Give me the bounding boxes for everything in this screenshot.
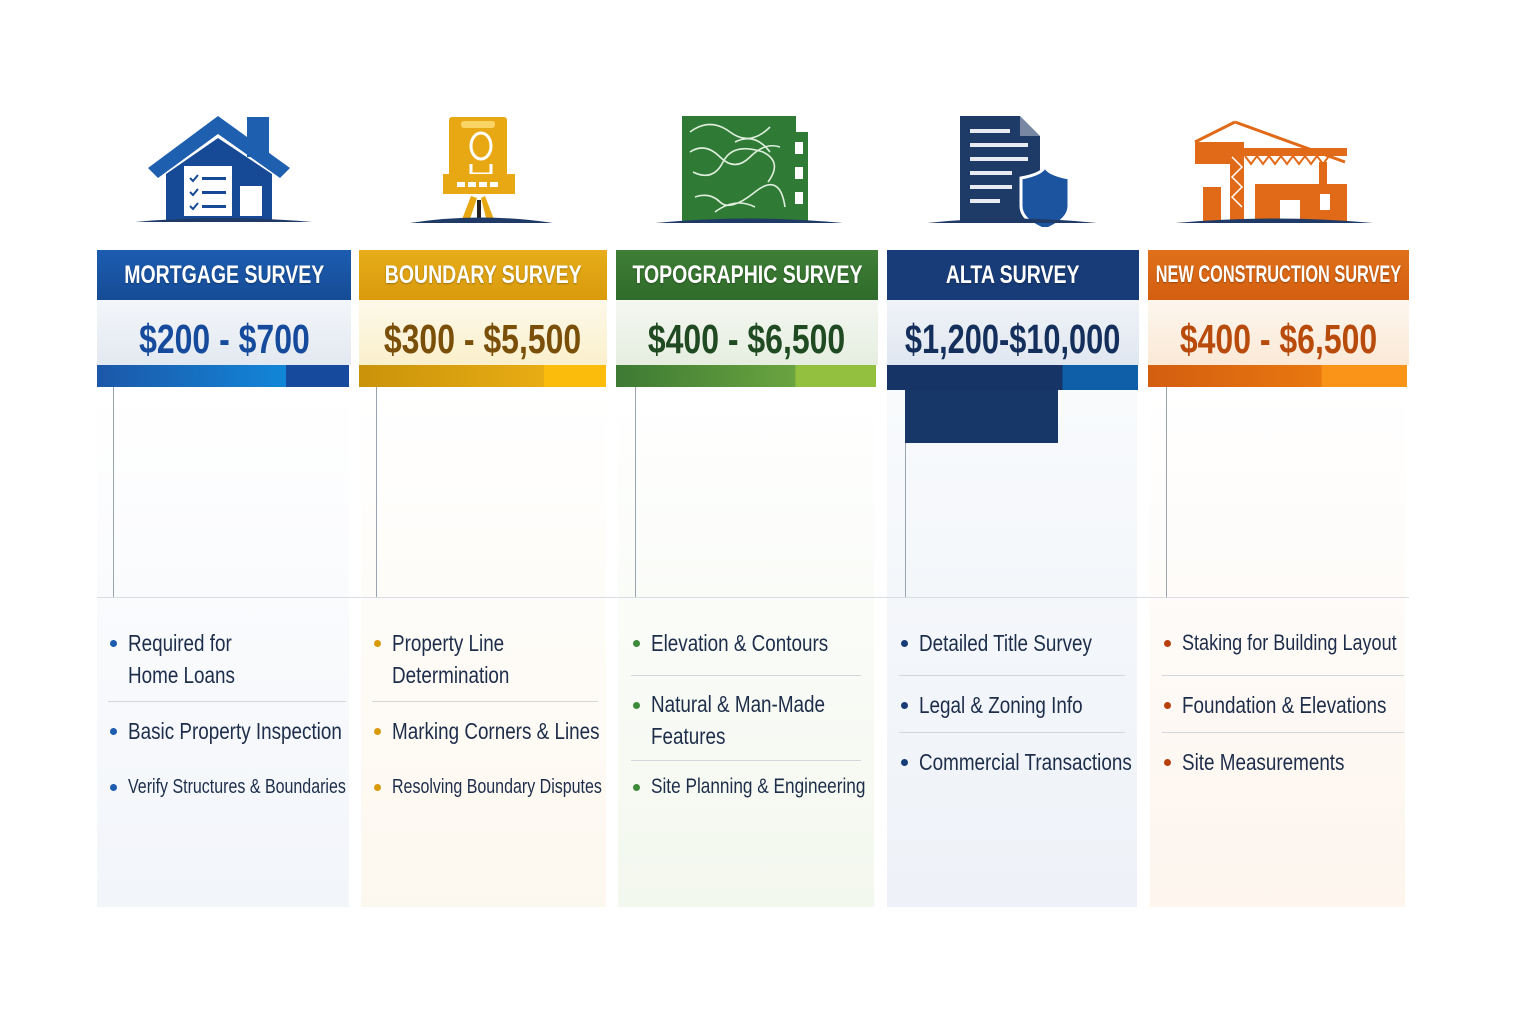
- price: alta: [887, 300, 1139, 365]
- bullets: construction: Foundation & Elevations: [1182, 692, 1386, 718]
- bullets: boundary: [372, 630, 602, 798]
- bullets: boundary: Determination: [392, 662, 509, 688]
- header: alta: [887, 250, 1139, 300]
- price: mortgage: $200 - $700: [139, 316, 309, 362]
- bullets: topographic: [631, 630, 865, 798]
- dark block: [905, 390, 1058, 443]
- bullets: boundary: Marking Corners & Lines: [392, 718, 600, 744]
- bullets: construction: Site Measurements: [1182, 749, 1344, 775]
- header: boundary: [359, 250, 607, 300]
- icon: house with checklist: [136, 116, 312, 222]
- bullets: mortgage: Required for: [128, 630, 232, 656]
- header: topographic: TOPOGRAPHIC SURVEY: [632, 260, 862, 288]
- header: boundary: BOUNDARY SURVEY: [385, 260, 581, 288]
- bullets: mortgage: Home Loans: [128, 662, 235, 688]
- panel: topographic survey: [616, 250, 878, 907]
- panel: alta survey: [887, 250, 1139, 907]
- price: topographic: [616, 300, 878, 365]
- header: alta: ALTA SURVEY: [946, 260, 1080, 288]
- icon: construction crane: [1176, 120, 1372, 223]
- price: boundary: [359, 300, 607, 365]
- bullets: mortgage: [108, 630, 346, 798]
- bullets: mortgage: Verify Structures & Boundaries: [128, 776, 346, 798]
- bullets: boundary: Property Line: [392, 630, 504, 656]
- price: construction: [1148, 300, 1409, 365]
- bullets: alta: Detailed Title Survey: [919, 630, 1092, 656]
- icon: document with shield: [927, 116, 1096, 227]
- price: construction: $400 - $6,500: [1180, 316, 1377, 362]
- panel: new construction survey: [1148, 250, 1409, 907]
- price: boundary: $300 - $5,500: [384, 316, 582, 362]
- header: construction: NEW CONSTRUCTION SURVEY: [1156, 261, 1401, 288]
- bullets: topographic: Features: [651, 723, 725, 749]
- bullets: alta: Commercial Transactions: [919, 749, 1132, 775]
- icon: topographic map: [656, 116, 842, 223]
- icon: total station: [410, 117, 553, 223]
- price: mortgage: [97, 300, 351, 365]
- bullets: topographic: Elevation & Contours: [651, 630, 828, 656]
- price: alta: $1,200-$10,000: [905, 316, 1121, 362]
- panel: boundary survey: [359, 250, 607, 907]
- bullets: boundary: Resolving Boundary Disputes: [392, 776, 602, 798]
- bullets: construction: Staking for Building Layout: [1182, 630, 1397, 655]
- price: topographic: $400 - $6,500: [648, 316, 846, 362]
- panel: mortgage survey: [97, 250, 351, 907]
- bullets: mortgage: Basic Property Inspection: [128, 718, 342, 744]
- bullets: topographic: Site Planning & Engineering: [651, 775, 865, 798]
- header: construction: [1148, 250, 1409, 300]
- bullets: topographic: Natural & Man-Made: [651, 691, 825, 717]
- bullets: construction: [1162, 630, 1404, 775]
- header: mortgage: [97, 250, 351, 300]
- header: topographic: [616, 250, 878, 300]
- header: mortgage: MORTGAGE SURVEY: [124, 260, 324, 288]
- bullets: alta: Legal & Zoning Info: [919, 692, 1083, 718]
- bullets: alta: [899, 630, 1132, 775]
